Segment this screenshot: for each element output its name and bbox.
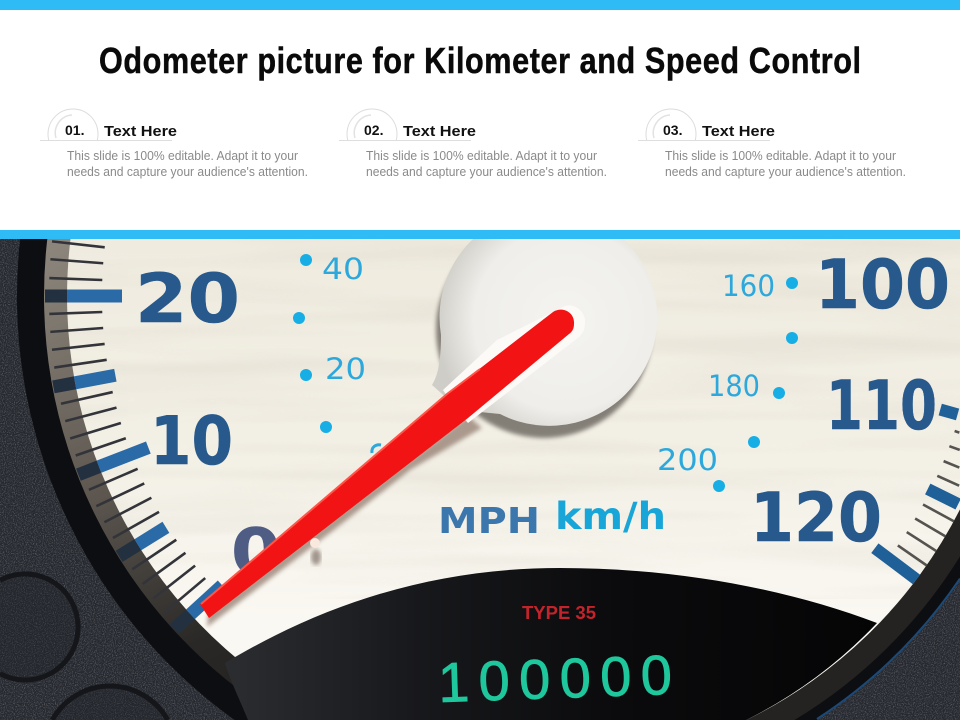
km/h scale numbers: 200	[657, 443, 718, 477]
photo: speedometer dial	[0, 222, 960, 720]
dial bezel	[17, 239, 960, 720]
unit labels: MPH	[438, 501, 540, 542]
icon: number badge 03: 03.	[663, 122, 682, 138]
dial face	[60, 239, 960, 720]
item heading: Text Here	[403, 123, 476, 140]
item description	[665, 149, 906, 179]
mph scale numbers: 120	[750, 479, 882, 558]
title: Odometer picture for Kilometer and Speed Control	[99, 42, 861, 82]
item heading: Text Here	[702, 123, 775, 140]
km/h scale numbers: 20	[325, 352, 366, 386]
item description: This slide is 100% editable. Adapt it to your	[665, 149, 896, 163]
icon: number badge 01: 01.	[65, 122, 84, 138]
mph scale numbers: 100	[815, 246, 950, 325]
icon: number badge 02: 02.	[364, 122, 383, 138]
item description: needs and capture your audience's attention.	[665, 165, 906, 179]
mph scale numbers: 20	[135, 260, 240, 339]
needle shadow	[207, 416, 482, 627]
unit labels: km/h	[555, 495, 666, 538]
needle hub	[432, 222, 657, 438]
item description: needs and capture your audience's attention.	[366, 165, 607, 179]
unit labels	[442, 500, 663, 533]
needle pin	[310, 538, 321, 565]
icon: number badge 02	[339, 109, 471, 161]
needle	[200, 305, 585, 618]
km/h scale numbers: 160	[722, 269, 775, 303]
right tick marks	[875, 410, 960, 579]
km/h scale numbers	[322, 252, 775, 477]
item description: This slide is 100% editable. Adapt it to your	[366, 149, 597, 163]
item 02	[339, 109, 607, 179]
odometer display	[225, 568, 877, 720]
divider accent bar	[0, 230, 960, 239]
icon: number badge 03	[638, 109, 770, 161]
km/h scale numbers: 40	[322, 252, 364, 286]
icon: number badge 01	[40, 109, 172, 161]
top accent bar	[0, 0, 960, 10]
item 01	[40, 109, 308, 179]
dashboard texture	[0, 239, 960, 720]
item description: needs and capture your audience's attention.	[67, 165, 308, 179]
km/h scale numbers: 180	[708, 369, 760, 403]
type label: TYPE 35	[522, 603, 596, 623]
item description	[366, 149, 607, 179]
odometer digits: 100000	[437, 643, 673, 714]
mph scale numbers: 10	[150, 402, 233, 480]
item heading: Text Here	[104, 123, 177, 140]
item description	[67, 149, 308, 179]
mph scale numbers	[135, 246, 950, 590]
left tick marks	[45, 241, 222, 629]
item description: This slide is 100% editable. Adapt it to your	[67, 149, 298, 163]
mph scale numbers: 0	[231, 516, 281, 590]
km/h scale dots	[293, 254, 798, 492]
item 03	[638, 109, 906, 179]
